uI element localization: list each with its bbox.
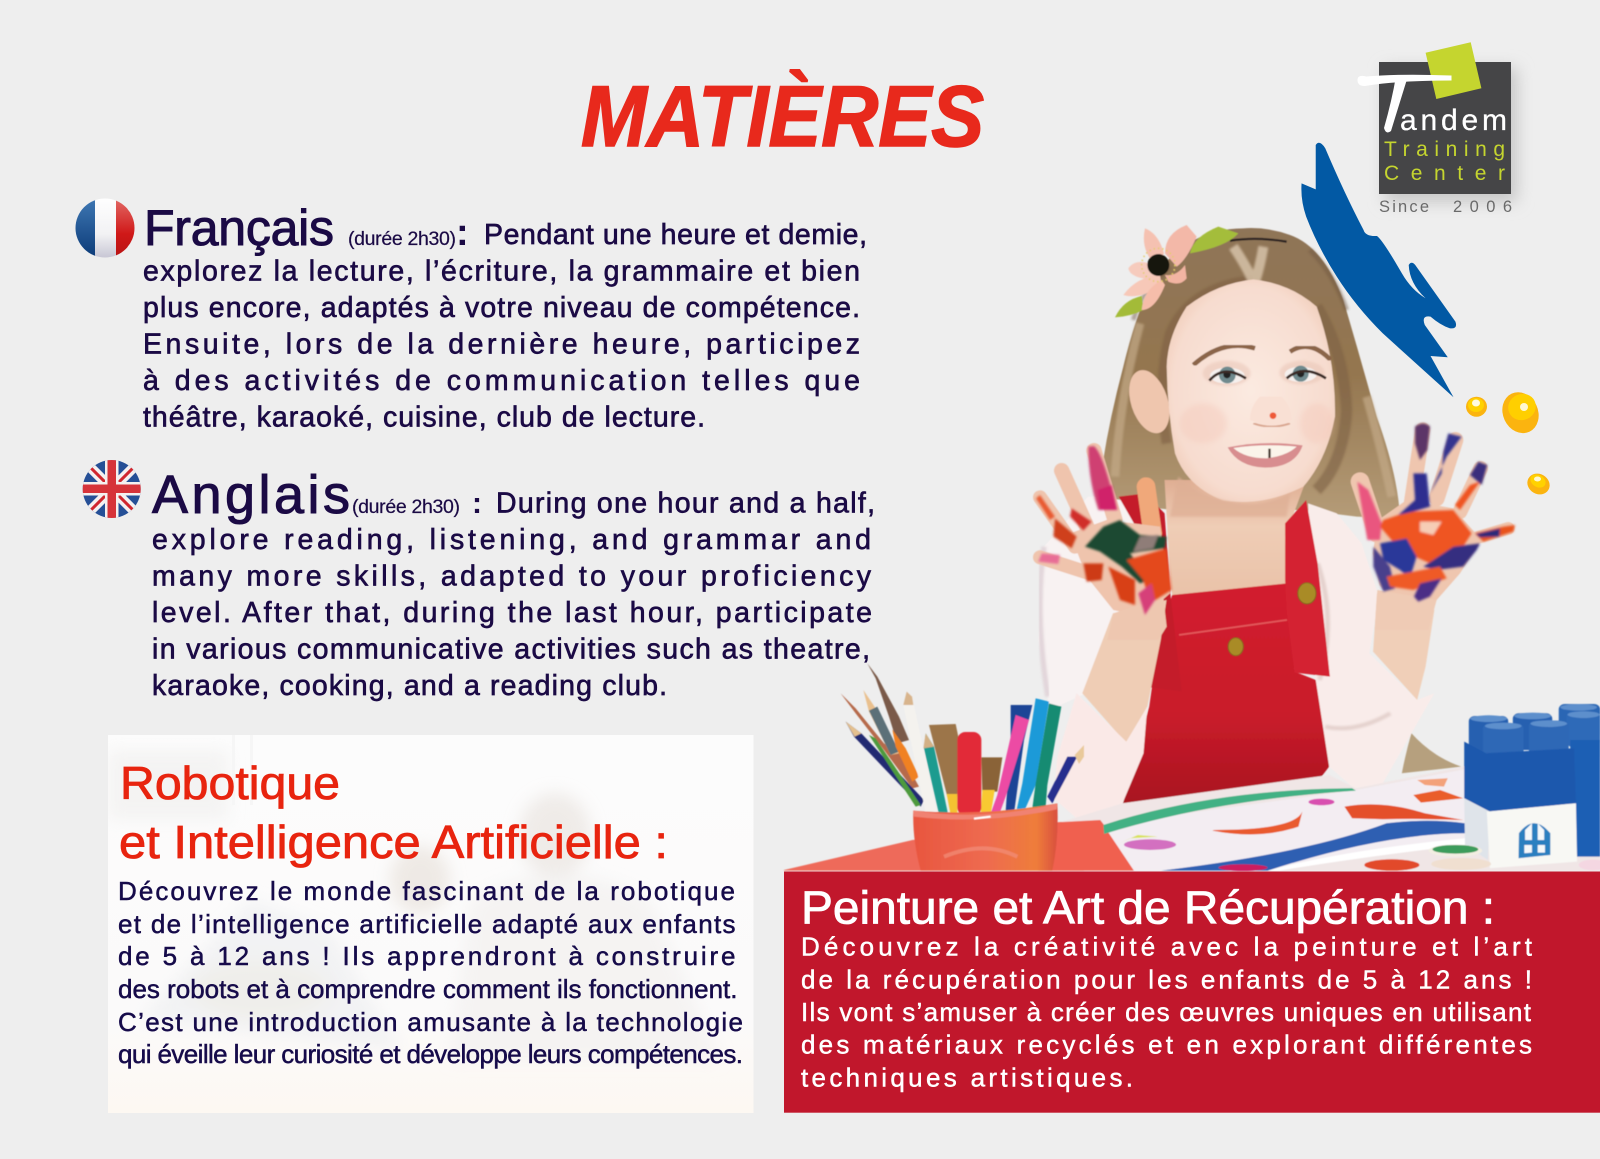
logo subtitle (1384, 138, 1505, 185)
text block: Painting description: des matériaux recyclés et en explorant différentes (801, 1030, 1532, 1060)
apron (1119, 493, 1330, 805)
text block: French description: théâtre, karaoké, cuisine, club de lecture. (143, 402, 705, 434)
logo shadow (1385, 68, 1517, 202)
text block: Painting description: Ils vont s’amuser à créer des œuvres uniques en utilisant (801, 997, 1532, 1027)
sleeve left (1054, 693, 1147, 822)
hair flower (1115, 225, 1238, 317)
text block: Painting description: de la récupération pour les enfants de 5 à 12 ans ! (801, 964, 1532, 994)
logo subtitle: Center (1384, 162, 1505, 185)
text block: French description: à des activités de communication telles que (143, 365, 860, 397)
panel: Robotique (108, 735, 754, 1113)
face (1167, 279, 1335, 517)
shirt left (1038, 497, 1172, 710)
hair tail (1402, 733, 1461, 773)
painted hand left (1036, 446, 1172, 640)
text block: English description: During one hour and a half, (496, 488, 875, 520)
toy blocks (1219, 704, 1600, 871)
heading: Peinture: Peinture et Art de Récupération : (801, 882, 1495, 934)
heading: Robotique: Robotique (120, 757, 340, 809)
text block: Robotics description: des robots et à comprendre comment ils fonctionnent. (118, 974, 738, 1004)
red paper (784, 820, 1135, 871)
duration label: (durée 2h30) (352, 496, 460, 518)
illustration: girl with painted hands (784, 225, 1600, 871)
logo since: 2006 (1453, 198, 1512, 216)
text block: Robotics description: C’est une introduction amusante à la technologie (118, 1007, 743, 1037)
painted book (1103, 769, 1465, 871)
heading: Robotique (119, 757, 668, 868)
text block: Painting description: Découvrez la créativité avec la peinture et l’art (801, 932, 1533, 962)
text block: Painting description: techniques artistiques. (801, 1062, 1133, 1092)
logo accent square (1426, 42, 1481, 99)
icon: blue paint splash (1301, 143, 1456, 397)
logo name: andem (1400, 104, 1507, 137)
panel: Peinture (784, 872, 1600, 1113)
text block: Robotics description: de 5 à 12 ans ! Ils apprendront à construire (118, 941, 736, 971)
icon: UK flag (82, 459, 142, 519)
heading: Anglais: Anglais (152, 465, 350, 525)
text block: English description: many more skills, adapted to your proficiency (152, 560, 872, 592)
title: MATIÈRES (581, 69, 984, 165)
section: Français (75, 198, 867, 434)
logo brush bar (1358, 75, 1451, 85)
icon: French flag (75, 198, 136, 258)
text block: Robotics description: qui éveille leur curiosité et développe leurs compétences. (118, 1039, 743, 1069)
logo T (1384, 76, 1408, 132)
logo square (1379, 62, 1511, 194)
forearm right (1373, 593, 1434, 700)
text block: French description: explorez la lecture, l’écriture, la grammaire et bien (143, 256, 860, 288)
text block: English description: level. After that, during the last hour, participate (152, 597, 872, 629)
logo: Tandem Training Center (1358, 42, 1517, 216)
neck and chest (1165, 480, 1306, 596)
text block: French description (143, 219, 867, 434)
section: Anglais (82, 459, 875, 702)
colon: : (472, 487, 482, 520)
panel background (784, 872, 1600, 1113)
text block: Robotics description: et de l’intelligence artificielle adapté aux enfants (118, 909, 736, 939)
heading: Robotique: et Intelligence Artificielle : (119, 816, 668, 868)
text block: Robotics description (118, 876, 743, 1069)
colon: : (456, 212, 469, 254)
text block: French description: Pendant une heure et demie, (484, 219, 867, 251)
panel background with faded photo (108, 735, 754, 1113)
ear (1122, 365, 1177, 438)
text block: English description: in various communicative activities such as theatre, (152, 634, 870, 666)
text block: French description: Ensuite, lors de la dernière heure, participez (143, 328, 860, 360)
headband (1230, 239, 1287, 242)
paint cup (913, 803, 1058, 871)
text block: English description: explore reading, listening, and grammar and (152, 524, 871, 556)
heading: Français: Français (144, 200, 334, 256)
text block: Robotics description: Découvrez le monde fascinant de la robotique (118, 876, 735, 906)
painted hand right (1357, 423, 1515, 630)
table surface (1057, 757, 1600, 871)
duration label: (durée 2h30) (348, 228, 456, 250)
text block: English description (152, 488, 875, 702)
pens and pencils (841, 663, 1084, 815)
logo since: Since (1379, 198, 1429, 216)
shirt right (1308, 503, 1434, 788)
forearm left (1082, 600, 1166, 743)
hair (1103, 228, 1400, 518)
text block: English description: karaoke, cooking, and a reading club. (152, 670, 667, 702)
icon: yellow paint drops (1466, 386, 1553, 498)
text block: Painting description (801, 932, 1533, 1092)
logo since (1379, 198, 1512, 216)
text block: French description: plus encore, adaptés à votre niveau de compétence. (143, 292, 860, 324)
logo subtitle: Training (1384, 138, 1505, 161)
